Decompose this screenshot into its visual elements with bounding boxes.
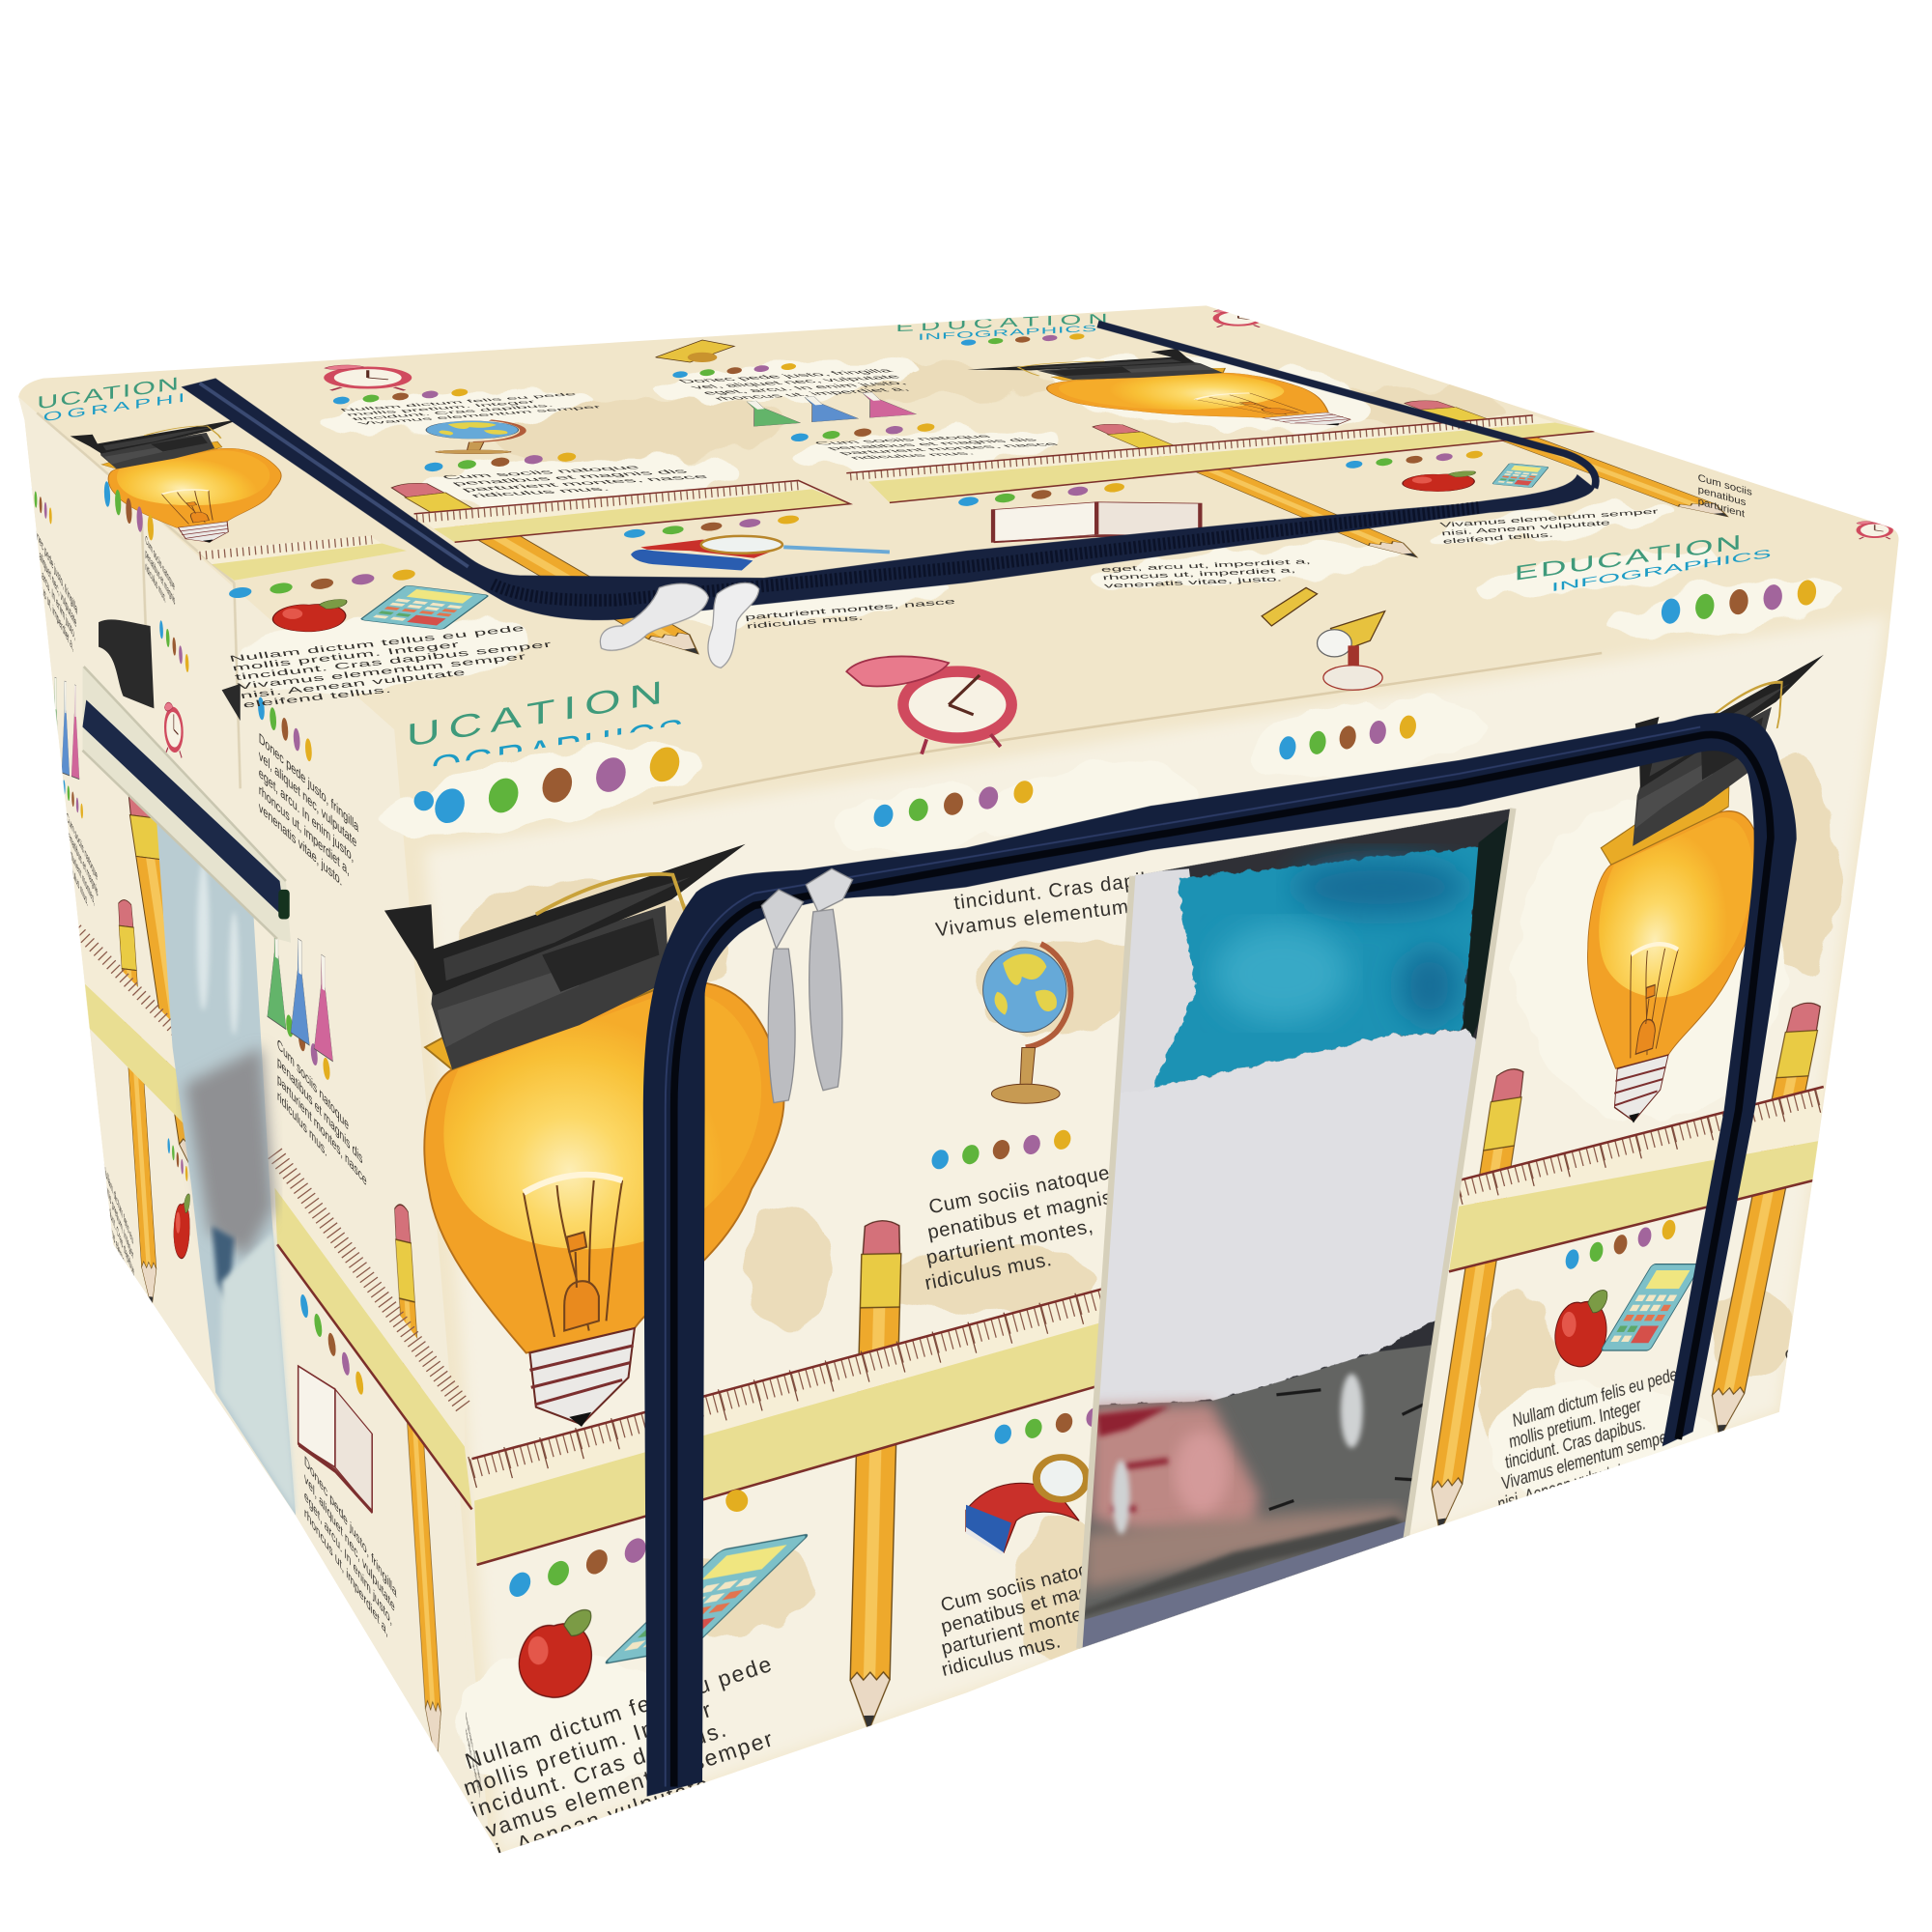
front window: white bedding bbox=[1084, 1030, 1497, 1407]
printed fabric artwork bbox=[18, 309, 1891, 1874]
pencil: front right one bbox=[1425, 1067, 1526, 1535]
title: INFOGRAPHICS right: INFOGRAPHICS bbox=[1551, 546, 1772, 594]
title: front corner OGRAPHICS: OGRAPHICS bbox=[431, 712, 684, 785]
icon: calculator top bbox=[360, 585, 489, 630]
text: front lower block: penatibus et magnis bbox=[939, 1575, 1117, 1637]
front zipper: stitching sheen bbox=[666, 727, 1700, 1786]
panel: pale clouds behind dots and text bbox=[231, 343, 1844, 1799]
text: side block lower: eget, arcu. In enim justo, bbox=[304, 1487, 392, 1629]
title: EDUCATION right: EDUCATION bbox=[1515, 530, 1742, 585]
text: far side lower: parturient montes, bbox=[67, 839, 95, 909]
icon: apple top right bbox=[1403, 471, 1475, 492]
front window: red smears bbox=[1096, 1406, 1171, 1512]
icon: clock right corner bbox=[1857, 521, 1891, 539]
text: far side lower: ridiculus mus. bbox=[67, 855, 88, 910]
front window: lighter teal sheen bbox=[1213, 924, 1350, 1023]
text: far side middle: Cum sociis natoque bbox=[146, 531, 175, 593]
title: front corner UCATION: UCATION bbox=[407, 673, 663, 753]
text: top left caption: Vivamus elementum semper bbox=[356, 405, 604, 426]
text: top right caption: nisi. Aenean vulputate bbox=[1440, 519, 1610, 537]
text: top front caption: tincidunt. Cras dapibus semper bbox=[234, 639, 553, 682]
top zipper: sheen on left run bbox=[200, 384, 469, 567]
text: front lower block: parturient montes, bbox=[939, 1600, 1100, 1660]
icon: magnet and magnifier top bbox=[631, 536, 890, 571]
front zipper: teeth line bbox=[674, 734, 1771, 1786]
icon: calculator top right bbox=[1492, 464, 1548, 488]
icon: calculator right bbox=[1601, 1264, 1701, 1350]
text: side block lower: vel, aliquet nec, vulputate bbox=[304, 1469, 395, 1615]
icon: calculator front bbox=[604, 1534, 810, 1663]
text: front bottom left block: mollis pretium. Integer bbox=[460, 1696, 716, 1801]
icon: clock large cropped by fold bbox=[846, 656, 1011, 754]
pencil: side face bbox=[393, 1203, 444, 1769]
text: top flask caption: parturient montes, nasce bbox=[835, 441, 1063, 456]
text: lower lid caption right: rhoncus ut, imperdiet a, bbox=[1102, 566, 1296, 582]
side window bbox=[156, 818, 296, 1516]
front window: black dashes bbox=[1269, 1390, 1423, 1509]
bulb: top lid bbox=[949, 341, 1435, 441]
text: front lower block: ridiculus mus. bbox=[940, 1631, 1063, 1681]
text: front upper block: penatibus et magnis bbox=[925, 1187, 1115, 1244]
pull: right slider bbox=[806, 868, 853, 912]
ruler: side face bbox=[274, 1148, 472, 1509]
title: top left OGRAPHI: OGRAPHI bbox=[43, 391, 185, 424]
dots rows bbox=[29, 333, 1816, 1600]
side zipper band bbox=[82, 667, 291, 943]
bulb: top left corner bbox=[65, 418, 308, 545]
text: side block middle: ridiculus mus. bbox=[277, 1087, 327, 1160]
icon: clock back bbox=[1213, 309, 1261, 327]
text: right panel block: Vivamus elementum semper bbox=[1499, 1425, 1675, 1493]
icon: microscope front bbox=[1262, 587, 1385, 690]
text: side block upper: Donec pede justo, fringilla bbox=[259, 729, 359, 836]
icon: small side cap bbox=[222, 684, 241, 721]
text: far side bottom: tincidunt. Cras dapibus. bbox=[103, 1191, 135, 1283]
text: top right caption: eleifend tellus. bbox=[1442, 530, 1553, 545]
text: lower lid caption: parturient montes, nasce bbox=[745, 597, 955, 622]
text: front upper block: ridiculus mus. bbox=[923, 1249, 1054, 1294]
title: top centre INFOGRAPHICS: INFOGRAPHICS bbox=[918, 323, 1096, 342]
text: corner edge fragment: Nullam dictum bbox=[466, 1709, 480, 1788]
text: far side upper: eget, arcu. In enim justo, bbox=[32, 550, 75, 643]
text: lower lid caption: ridiculus mus. bbox=[746, 613, 864, 631]
icon: apple top bbox=[272, 599, 347, 632]
text: top right caption: Vivamus elementum semper bbox=[1439, 507, 1660, 528]
text: side block upper: rhoncus ut, imperdiet a, bbox=[259, 781, 350, 879]
text: top middle caption: Donec pede justo, fringilla bbox=[675, 368, 896, 384]
text: top left caption: Nullam dictum felis eu pede bbox=[338, 392, 579, 412]
pencil: far side large bbox=[128, 796, 188, 1163]
pull: right tag bbox=[810, 909, 842, 1091]
text: top front caption: nisi. Aenean vulputate bbox=[240, 668, 467, 700]
bulb: front main with graduation cap bbox=[384, 844, 784, 1427]
text: front bottom left block: Vivamus elementum semper bbox=[461, 1725, 778, 1850]
text: front bottom left block: tincidunt. Cras dapibus. bbox=[461, 1716, 730, 1825]
icon: book side bbox=[298, 1355, 372, 1512]
text: far side upper: rhoncus ut, imperdiet a, bbox=[32, 564, 73, 655]
text: side block middle: Cum sociis natoque bbox=[277, 1036, 349, 1134]
text: right edge fragment: p bbox=[1785, 1366, 1799, 1386]
text: far side bottom: Nullam dictum felis eu bbox=[103, 1161, 133, 1248]
front window: dark band bbox=[1082, 1517, 1410, 1616]
icon: apple far side bbox=[174, 1194, 190, 1259]
text: right panel block: Nullam dictum felis eu pede bbox=[1510, 1364, 1680, 1431]
text: top front caption: mollis pretium. Integer bbox=[231, 639, 461, 673]
top zipper pulls bbox=[600, 582, 759, 668]
text: front globe caption two: Vivamus elementum semper bbox=[934, 887, 1208, 941]
side window: pale reflection bbox=[219, 1233, 296, 1513]
text: side block upper: vel, aliquet nec, vulputate bbox=[259, 747, 356, 851]
icon: magnet and magnifier front bbox=[966, 1457, 1087, 1554]
seam line bbox=[653, 653, 1602, 804]
icon: flasks far side bbox=[52, 676, 79, 780]
front window: dark vinyl top right bbox=[1462, 813, 1516, 1056]
text: top middle caption: eget, arcu. In enim justo, bbox=[699, 380, 910, 396]
panel: sand washes bbox=[456, 365, 1841, 1663]
text: far side bottom: mollis pretium. Integer bbox=[103, 1177, 133, 1264]
panel: front lower face bbox=[425, 616, 1887, 1853]
front zipper bbox=[643, 713, 1797, 1797]
panel: left side face bbox=[18, 397, 491, 1853]
text: front upper block: parturient montes, bbox=[924, 1216, 1095, 1269]
icon: globe front bbox=[983, 944, 1070, 1103]
text: far top right caption: parturient bbox=[1698, 497, 1745, 520]
text: top flask caption: Cum sociis natoque bbox=[811, 434, 995, 445]
text: right panel block: mollis pretium. Integer bbox=[1506, 1394, 1645, 1452]
icon: flasks side bbox=[268, 918, 333, 1062]
text: top globe caption: penatibus et magnis dis bbox=[448, 468, 691, 487]
text: lower lid caption right: eget, arcu ut, imperdiet a, bbox=[1100, 557, 1311, 574]
front window: piping bbox=[1079, 809, 1513, 1649]
text: top globe caption: Cum sociis natoque bbox=[439, 464, 642, 480]
text: top globe caption: ridiculus mus. bbox=[468, 485, 612, 498]
ruler: front left bbox=[472, 1289, 1103, 1565]
front window: blue base strip bbox=[1072, 1518, 1417, 1651]
text: front bottom left block: nisi. Aenean vulputate bbox=[461, 1771, 714, 1874]
front window: contents clipped to opening bbox=[1072, 809, 1516, 1658]
front window: vinyl highlights bbox=[1113, 1374, 1363, 1534]
top zipper: back thin run bbox=[1097, 324, 1596, 488]
text: top front caption: eleifend tellus. bbox=[242, 685, 393, 710]
text: top front caption: Vivamus elementum semper bbox=[237, 651, 527, 692]
pencil: top lid centre bbox=[1087, 423, 1435, 558]
front window: lower plastic bbox=[1072, 1343, 1448, 1658]
text: top left caption: mollis pretium. Integer bbox=[345, 400, 538, 417]
icon: book top bbox=[993, 499, 1200, 542]
ruler: front right bbox=[1449, 1087, 1824, 1271]
icon: apple front bbox=[517, 1609, 594, 1699]
pencil: top right bbox=[1399, 400, 1747, 518]
front window: clear vinyl base bbox=[1079, 809, 1513, 1649]
side window: grey bedding bbox=[185, 1047, 273, 1257]
fabric body bbox=[18, 305, 1899, 1853]
text: top middle caption: vel, aliquet nec, vulputate bbox=[688, 374, 904, 390]
front zipper pulls bbox=[761, 868, 853, 1103]
storage box bbox=[18, 305, 1899, 1874]
text: far side upper: vel, aliquet nec, vulputate bbox=[32, 534, 76, 632]
text: top left caption: tincidunt. Cras dapibus. bbox=[351, 403, 555, 421]
top zipper: front thick run bbox=[182, 379, 1595, 620]
front window: deep pink centre bbox=[1175, 1431, 1229, 1515]
ruler: top right bbox=[846, 415, 1595, 502]
text: front upper block: Cum sociis natoque bbox=[927, 1162, 1112, 1218]
text: side block upper: venenatis vitae, justo. bbox=[259, 798, 342, 890]
front zipper: frame bbox=[643, 713, 1797, 1797]
text: front bottom left block: Nullam dictum felis eu pede bbox=[462, 1651, 776, 1774]
text: right edge fragment: C bbox=[1782, 1345, 1799, 1365]
icon: clock far side bbox=[164, 701, 183, 758]
ruler: far side bbox=[76, 924, 191, 1131]
pull: left tag bbox=[768, 949, 795, 1103]
text: corner edge fragment: mollis pretium bbox=[466, 1723, 480, 1802]
text: side block middle: parturient montes, nasce bbox=[277, 1069, 367, 1189]
text: front lower block: Cum sociis natoque bbox=[939, 1553, 1113, 1616]
text: far side lower: penatibus et magnis bbox=[67, 825, 98, 900]
icon: flasks top bbox=[729, 391, 916, 426]
text: top globe caption: parturient montes, nasce bbox=[458, 473, 711, 493]
text: far side bottom: Vivamus elementum bbox=[103, 1206, 131, 1287]
text: far top right caption: Cum sociis bbox=[1698, 472, 1752, 498]
pencil: front centre bbox=[849, 1220, 902, 1731]
text: right panel block: tincidunt. Cras dapibus. bbox=[1502, 1413, 1648, 1473]
text: side block lower: rhoncus ut, imperdiet a, bbox=[304, 1503, 388, 1640]
icon: clock top bbox=[325, 365, 407, 390]
icon: microscope top bbox=[656, 340, 734, 362]
text: side block upper: eget, arcu. In enim justo, bbox=[259, 764, 354, 866]
pencil: far side small bbox=[117, 899, 159, 1310]
front window: pink reflected fabric bbox=[1091, 1404, 1260, 1533]
ruler: top lid bbox=[414, 480, 850, 542]
text: far top right caption: penatibus bbox=[1698, 484, 1747, 508]
text: top front caption: Nullam dictum tellus eu pede bbox=[228, 623, 526, 664]
ruler: top left corner bbox=[197, 536, 407, 581]
front window: tan lower band bbox=[1084, 1507, 1410, 1591]
text: far side middle: penatibus et magnis bbox=[146, 545, 175, 608]
top zipper bbox=[182, 324, 1596, 620]
front window: darker teal folds bbox=[1293, 860, 1466, 1023]
text: top middle caption: rhoncus ut, imperdiet a, bbox=[711, 386, 912, 402]
title: top centre EDUCATION: EDUCATION bbox=[895, 311, 1108, 334]
text: side block middle: penatibus et magnis dis bbox=[277, 1053, 363, 1167]
front window: white towel roll edge bbox=[1103, 868, 1205, 1103]
text: lower lid caption right: venenatis vitae, justo. bbox=[1103, 575, 1283, 590]
pencil: top lid left bbox=[385, 481, 719, 656]
text: far side upper: Donec pede justo, fringilla bbox=[32, 520, 77, 619]
pull: left slider bbox=[761, 890, 804, 949]
text: far side middle: ridiculus mus. bbox=[146, 558, 166, 606]
side window: vinyl streaks bbox=[197, 863, 239, 1035]
icon: far side cap bbox=[99, 619, 154, 708]
top zipper: teeth ribbing bbox=[493, 508, 1479, 600]
text: far side lower: Cum sociis natoque bbox=[67, 810, 98, 885]
text: right edge fragment: r bbox=[1788, 1388, 1799, 1407]
bulb: front right with graduation cap bbox=[1561, 655, 1824, 1130]
title: top left UCATION: UCATION bbox=[37, 374, 179, 413]
text: side block lower: Donec pede justo, fringilla bbox=[304, 1452, 397, 1601]
text: front globe caption: tincidunt. Cras dapibus. bbox=[952, 865, 1183, 914]
text: right panel block: nisi. Aenean vulputate bbox=[1495, 1458, 1632, 1515]
front window: teal towel bbox=[1152, 846, 1481, 1088]
text: top flask caption: penatibus et magnis dis bbox=[823, 438, 1040, 451]
fold seams on side bbox=[37, 412, 241, 788]
icon: globe top bbox=[426, 420, 523, 454]
pencil: front right two bbox=[1703, 1002, 1823, 1438]
side window: dark blue shadow bbox=[212, 1226, 234, 1306]
front window bbox=[1072, 809, 1516, 1658]
icon: apple right bbox=[1555, 1291, 1607, 1367]
text: top flask caption: ridiculus mus. bbox=[846, 451, 978, 461]
